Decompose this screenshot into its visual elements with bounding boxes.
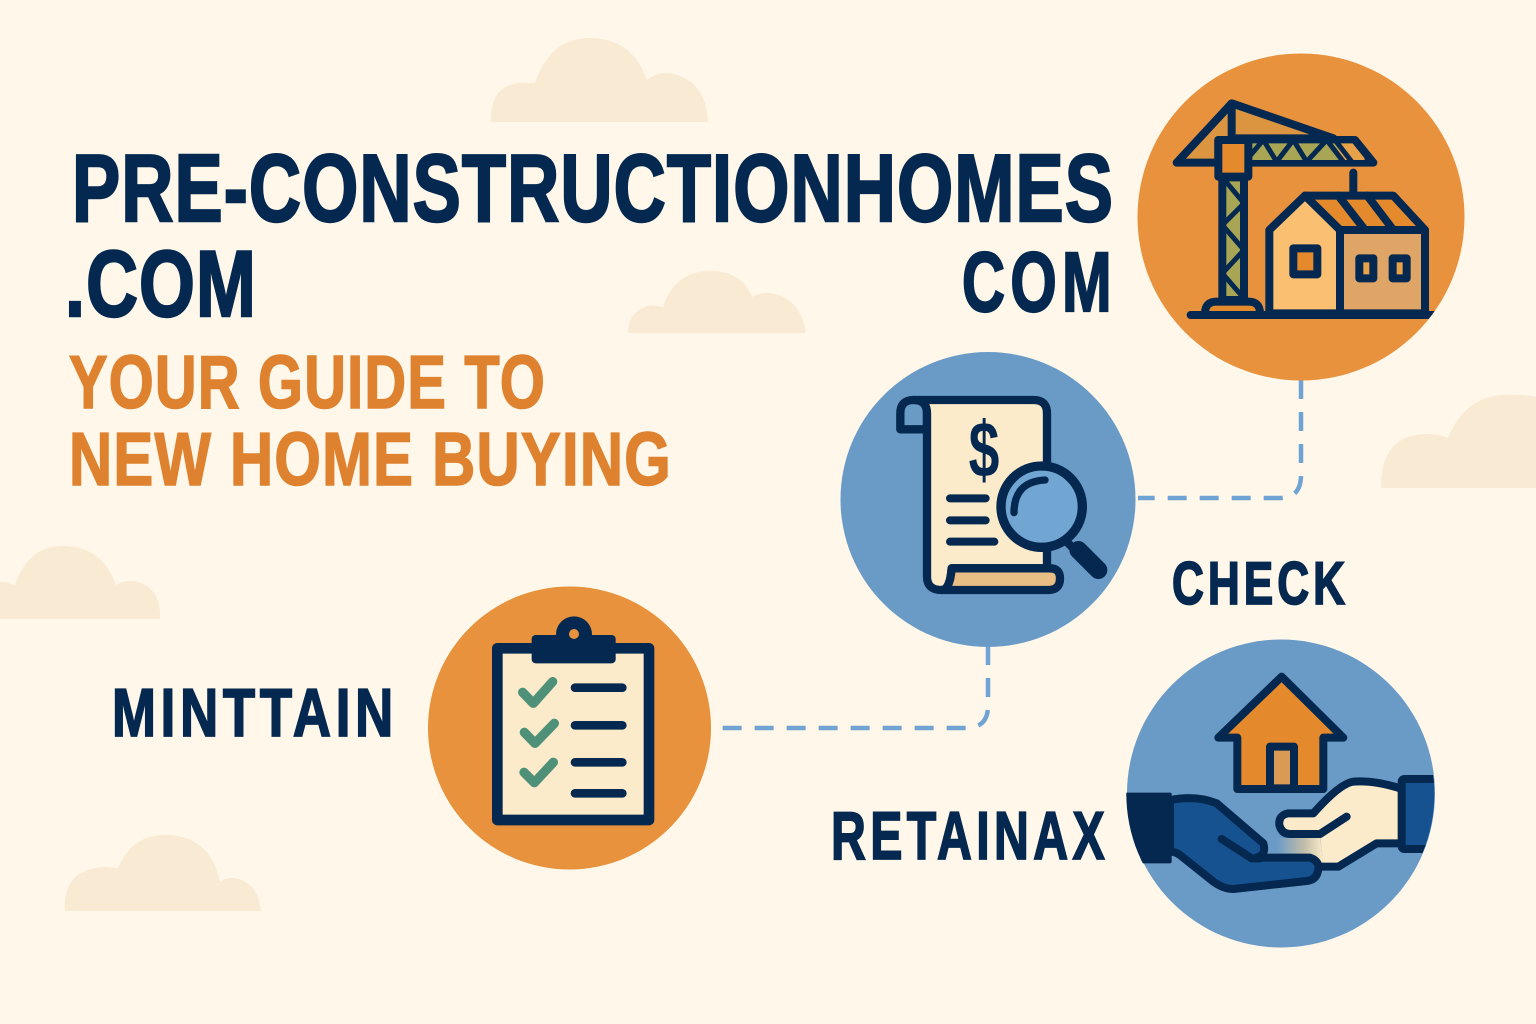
label: minttain: MINTTAIN [112,675,398,751]
icon: document with magnifier: $ [969,406,999,494]
icon: document with magnifier [840,352,1136,647]
subtitle: YOUR GUIDE TO [69,340,546,424]
title: .COM [65,231,257,336]
label: retainax: RETAINAX [831,798,1109,874]
connector: crane to document [1138,380,1301,498]
title: PRE-CONSTRUCTIONHOMES [72,135,1114,242]
icon: hands passing a house [1120,640,1442,948]
label: com: COM [962,235,1117,329]
connector: document to clipboard [722,646,988,728]
subtitle: NEW HOME BUYING [69,417,672,501]
icon: crane and house [1138,54,1464,380]
title [65,135,1114,336]
subtitle [69,340,672,501]
icon: clipboard checklist [428,586,711,870]
label: check: CHECK [1172,550,1349,617]
